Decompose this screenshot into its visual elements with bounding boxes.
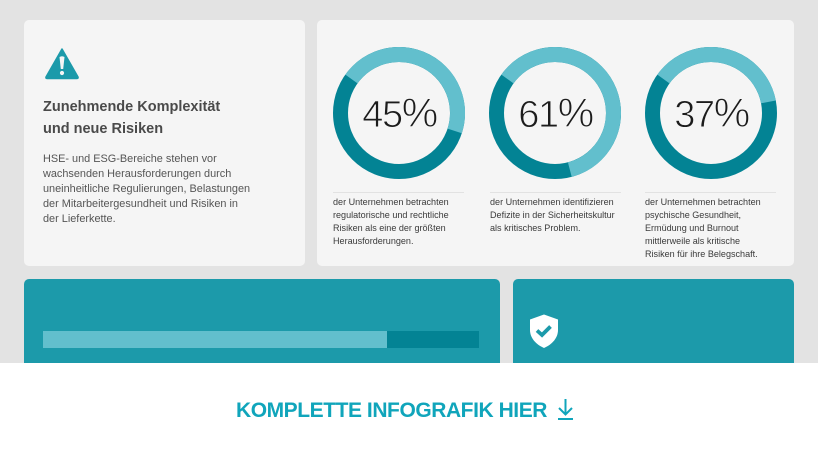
caption: 61%: als kritisches Problem. xyxy=(490,223,580,233)
caption: 45% xyxy=(333,192,464,248)
panel: safety xyxy=(513,279,794,389)
caption: 61% xyxy=(490,192,621,235)
panel: bar statistic xyxy=(24,279,500,389)
text: intro paragraph: uneinheitliche Regulierungen, Belastungen xyxy=(43,183,250,195)
donut chart: 45%: 45% xyxy=(362,90,437,136)
heading: complexity: Zunehmende Komplexität xyxy=(43,99,220,115)
heading: complexity: und neue Risiken xyxy=(43,120,163,136)
caption: 61%: der Unternehmen identifizieren xyxy=(490,197,614,207)
caption: 37%: psychische Gesundheit, xyxy=(645,210,741,220)
text: intro paragraph: der Mitarbeitergesundheit und Risiken in xyxy=(43,198,238,210)
text: intro paragraph: HSE- und ESG-Bereiche stehen vor xyxy=(43,153,217,165)
bar segment: share xyxy=(43,331,387,348)
caption: 45%: Risiken als eine der größten xyxy=(333,223,446,233)
text: intro paragraph: wachsenden Herausforderungen durch xyxy=(43,168,231,180)
call to action bar xyxy=(0,363,818,452)
caption: 45%: regulatorische und rechtliche xyxy=(333,210,449,220)
caption: 45%: Herausforderungen. xyxy=(333,236,413,246)
caption: 61%: Defizite in der Sicherheitskultur xyxy=(490,210,615,220)
text: intro paragraph xyxy=(43,153,250,225)
heading: complexity xyxy=(43,99,220,136)
donut chart: 37% xyxy=(645,47,777,179)
text: download link: KOMPLETTE INFOGRAFIK HIER xyxy=(236,399,547,422)
text: intro paragraph: der Lieferkette. xyxy=(43,213,116,225)
caption: 45%: der Unternehmen betrachten xyxy=(333,197,449,207)
panel: complexity intro xyxy=(24,20,305,266)
icon: download arrow xyxy=(558,399,573,420)
icon: warning triangle xyxy=(45,48,79,80)
icon: shield with check xyxy=(530,314,558,348)
caption: 37%: mittlerweile als kritische xyxy=(645,236,740,246)
caption: 37%: Ermüdung und Burnout xyxy=(645,223,739,233)
donut chart: 61% xyxy=(489,47,621,179)
donut chart: 61%: 61% xyxy=(518,90,593,136)
caption: 37%: der Unternehmen betrachten xyxy=(645,197,761,207)
panel: statistics xyxy=(317,20,794,266)
donut chart: 45% xyxy=(333,47,465,179)
donut chart: 37%: 37% xyxy=(674,90,749,136)
bar chart: progress bar xyxy=(43,331,479,348)
caption: 37% xyxy=(645,192,776,261)
caption: 37%: Risiken für ihre Belegschaft. xyxy=(645,249,758,259)
